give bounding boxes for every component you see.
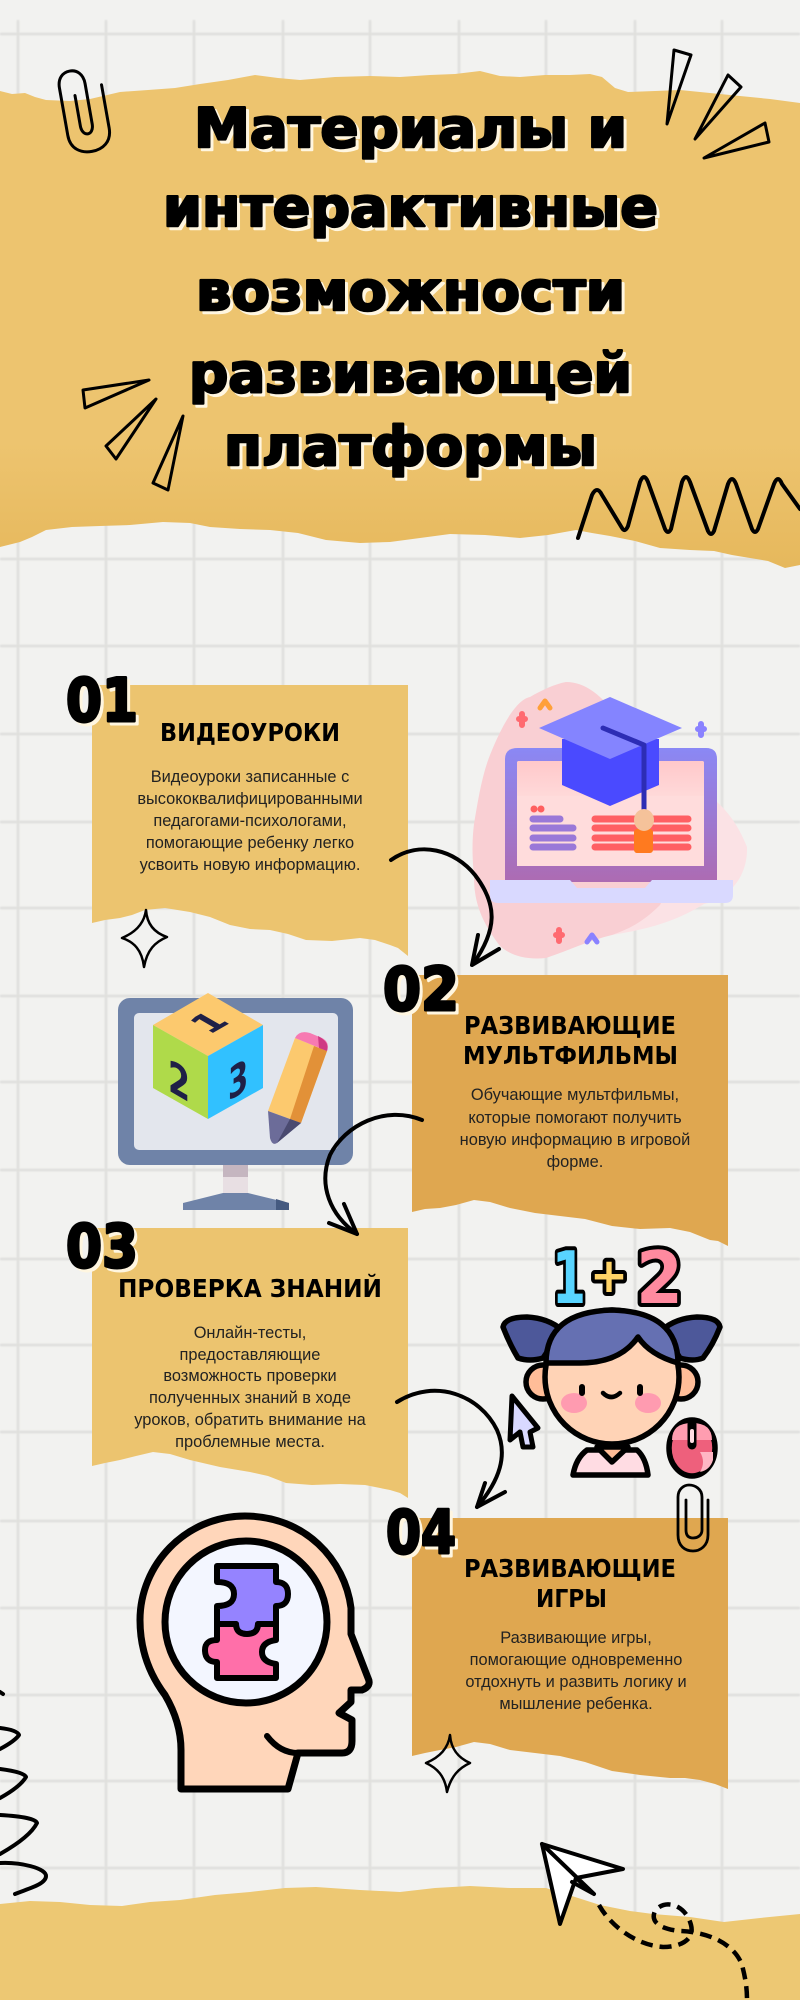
icon: paper plane with dashed trail bbox=[542, 1844, 747, 2000]
panel: card 02 bbox=[383, 955, 728, 1246]
panel: card 01 bbox=[66, 666, 408, 956]
panel: card 04 bbox=[386, 1498, 728, 1789]
text: video lessons: усвоить новую информацию. bbox=[140, 856, 360, 874]
panel: top torn paper band bbox=[0, 71, 800, 568]
title: возможности bbox=[196, 260, 625, 323]
math digits: 2 bbox=[636, 1236, 683, 1320]
text: knowledge test: уроков, обратить внимание на bbox=[134, 1411, 367, 1429]
heading: cartoons: РАЗВИВАЮЩИЕ bbox=[464, 1011, 676, 1040]
icon: scribble bottom-left bbox=[0, 1692, 46, 1894]
number 03: 03 bbox=[66, 1212, 138, 1282]
text: games bbox=[465, 1629, 687, 1713]
illustration: monitor with cube and pencil bbox=[118, 993, 353, 1210]
heading: games bbox=[464, 1554, 676, 1613]
text: video lessons: педагогами-психологами, bbox=[153, 812, 347, 830]
heading: cartoons: МУЛЬТФИЛЬМЫ bbox=[463, 1041, 678, 1070]
cube digits: 1 bbox=[180, 1006, 239, 1039]
arrow: card 02 to card 03 bbox=[325, 1115, 422, 1234]
icon: spikes left of title bbox=[83, 380, 183, 490]
title: интерактивные bbox=[163, 176, 658, 239]
panel: bottom torn paper band bbox=[0, 1886, 800, 2000]
heading: cartoons bbox=[463, 1011, 678, 1070]
text: cartoons: которые помогают получить bbox=[468, 1109, 682, 1127]
text: video lessons: высококвалифицированными bbox=[137, 790, 363, 808]
icon: sparkle card 04 bbox=[426, 1735, 470, 1792]
arrow: card 03 to card 04 bbox=[397, 1391, 505, 1507]
math digits: + bbox=[590, 1248, 628, 1304]
title bbox=[163, 97, 658, 478]
math digits: 1 bbox=[552, 1236, 586, 1320]
icon: spikes top-right bbox=[667, 50, 769, 158]
cube digits bbox=[168, 1006, 248, 1114]
text: games: помогающие одновременно bbox=[470, 1651, 682, 1669]
number 02: 02 bbox=[383, 955, 459, 1025]
number 04: 04 bbox=[386, 1498, 456, 1568]
text: knowledge test: Онлайн-тесты, bbox=[194, 1324, 306, 1342]
text: knowledge test bbox=[134, 1324, 367, 1451]
text: knowledge test: возможность проверки bbox=[163, 1367, 337, 1385]
text: video lessons bbox=[137, 768, 363, 874]
text: cartoons: новую информацию в игровой bbox=[460, 1131, 690, 1149]
icon: paperclip top-left bbox=[57, 66, 113, 155]
text: video lessons: помогающие ребенку легко bbox=[146, 834, 354, 852]
illustration: head with puzzle bbox=[140, 1516, 369, 1789]
heading: knowledge test: ПРОВЕРКА ЗНАНИЙ bbox=[118, 1274, 382, 1303]
text: games: Развивающие игры, bbox=[500, 1629, 652, 1647]
arrow: card 01 to card 02 bbox=[391, 849, 499, 965]
heading: video lessons: ВИДЕОУРОКИ bbox=[160, 718, 340, 747]
title: Материалы и bbox=[194, 97, 627, 160]
number 01: 01 bbox=[66, 666, 138, 736]
icon: zigzag bbox=[578, 477, 800, 538]
cube digits: 3 bbox=[228, 1050, 248, 1112]
heading: games: РАЗВИВАЮЩИЕ bbox=[464, 1554, 676, 1583]
title: развивающей bbox=[189, 342, 632, 405]
math digits bbox=[552, 1236, 683, 1320]
panel: card 03 bbox=[66, 1212, 408, 1498]
illustration: girl with math bbox=[503, 1236, 720, 1476]
cube digits: 2 bbox=[168, 1049, 190, 1114]
icon: paperclip lower right bbox=[678, 1485, 708, 1551]
text: games: мышление ребенка. bbox=[499, 1695, 653, 1713]
illustration: laptop and graduation cap bbox=[472, 682, 747, 958]
heading: games: ИГРЫ bbox=[536, 1584, 607, 1613]
text: cartoons bbox=[460, 1086, 690, 1171]
icon: sparkle card 01 bbox=[122, 910, 167, 967]
title: платформы bbox=[224, 415, 597, 478]
text: video lessons: Видеоуроки записанные с bbox=[151, 768, 349, 786]
text: cartoons: форме. bbox=[547, 1153, 603, 1171]
text: cartoons: Обучающие мультфильмы, bbox=[471, 1086, 679, 1104]
text: games: отдохнуть и развить логику и bbox=[465, 1673, 687, 1691]
text: knowledge test: предоставляющие bbox=[180, 1346, 320, 1364]
text: knowledge test: полученных знаний в ходе bbox=[149, 1389, 351, 1407]
text: knowledge test: проблемные места. bbox=[175, 1433, 325, 1451]
